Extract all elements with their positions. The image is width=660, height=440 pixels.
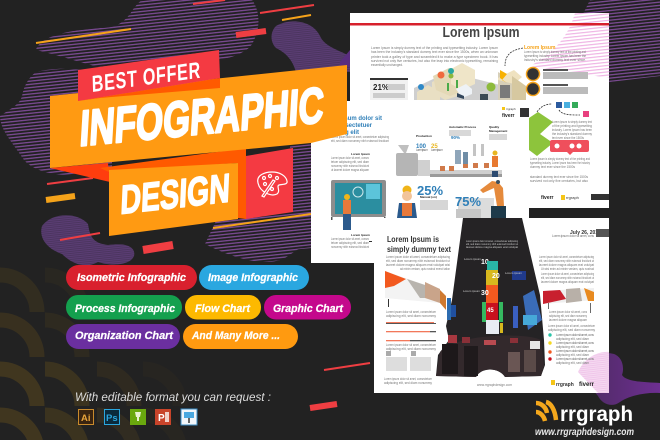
document 1 paragraph: has been the industry's standard dummy text ever since the 1500s, when an unknown — [371, 50, 498, 54]
tablet dashboard with worker — [331, 180, 386, 230]
left column text: elit, sed diam nonummy nibh euismod tincidunt ut — [386, 259, 450, 263]
document 1 paragraph: essentially unchanged. — [371, 63, 403, 67]
right lower list with bullets: adipiscing elit, sed diam nonummy — [549, 314, 587, 318]
stacked percentage tower: Lorem ipsum — [505, 271, 522, 275]
website: www.rrgraphdesign.com — [535, 427, 634, 438]
right lower list with bullets: adipiscing elit, sed diam — [556, 337, 589, 341]
social media icons and callout: text ever since the 1500s — [552, 136, 584, 140]
editable format text: With editable format you can request : — [75, 392, 271, 404]
document 2 text: Lorem ipsum dolor sit amet, consectetuer adipiscing — [331, 135, 389, 139]
right column text: elit, sed diam nonummy nibh euismod tincidunt ut — [539, 259, 594, 263]
lorem ipsum side heading and circles — [505, 45, 588, 96]
document 2 text: Management — [489, 129, 507, 133]
stacked percentage tower: 45 — [487, 308, 494, 314]
logo mark — [536, 402, 556, 421]
design text: DESIGN — [120, 165, 231, 223]
best offer shadow — [78, 78, 220, 101]
document 1 paragraph: printer took a galley of type and scrambled it to make a type specimen book. It has — [371, 55, 498, 59]
progress bars and lower left text: adipiscing elit, sed diam nonummy — [386, 347, 436, 351]
pill: graphic chart: Graphic Chart — [273, 303, 344, 315]
document 2 text: Lorem ipsum — [431, 148, 443, 152]
red icon square — [246, 148, 293, 219]
icon: illustrator: Ai — [81, 413, 90, 424]
document 2: process infographic — [311, 101, 529, 263]
document 3 footer logos: www.rrgraphdesign.com — [477, 383, 512, 387]
social media icons and callout: of the printing and typesetting — [552, 124, 592, 128]
pill: flow chart: Flow Chart — [195, 303, 251, 315]
document 2 heading: adipiscing elit — [319, 130, 359, 136]
right lower list with bullets: adipiscing elit, sed diam — [556, 361, 589, 365]
lorem ipsum side heading and circles: Lorem Ipsum is simply dummy text of the printing and — [524, 50, 586, 54]
progress bars and lower left text: adipiscing elit, sed diam nonummy — [386, 314, 436, 318]
software icons — [78, 409, 197, 425]
right lower list with bullets: Lorem ipsum dolor sit amet, cons — [549, 310, 587, 314]
pill: organization chart — [66, 324, 180, 349]
right lower list with bullets: adipiscing elit, sed diam — [556, 353, 589, 357]
document 2 heading — [319, 116, 382, 136]
main orange ribbon — [50, 65, 347, 168]
document 3: image infographic — [374, 218, 609, 393]
left brochure image — [385, 271, 446, 310]
logo wordmark: rrgraph — [560, 403, 633, 426]
trapezoid paragraph: Lorem ipsum dolor sit amet, consectetuer adipiscing — [466, 239, 518, 243]
stat 21% — [370, 78, 408, 100]
crowd — [436, 335, 544, 377]
right lower list with bullets: adipiscing elit, sed diam — [556, 345, 589, 349]
isometric city illustration — [414, 63, 526, 100]
pill: image infographic: Image Infographic — [208, 272, 298, 284]
document 2 logos: fiverr — [502, 113, 515, 119]
pill: isometric infographic: Isometric Infographic — [77, 272, 186, 284]
document 1 paragraph: survived not only five centuries, but also the leap into electronic typesetting, remaining — [371, 59, 498, 63]
date header — [552, 229, 609, 238]
pill: flow chart — [185, 295, 261, 320]
dark trapezoid with photo — [436, 218, 545, 377]
document 2 heading: Lorem ipsum dolor sit — [319, 116, 382, 122]
stacked percentage tower — [463, 257, 522, 320]
pill: process infographic: Process Infographic — [75, 303, 175, 315]
document 2 text: Automatic Process — [449, 125, 477, 129]
document 2 logos: rrgraph — [506, 107, 516, 111]
document 3 heading — [387, 234, 451, 254]
stat 21%: 21% — [373, 83, 389, 92]
rrgraph logo — [535, 402, 634, 438]
right lower list with bullets — [548, 303, 596, 365]
date header: Lorem ipsum dolor sit amet, cons — [552, 234, 594, 238]
best offer text: BEST OFFER — [91, 57, 201, 97]
document 2 text: Quality — [489, 125, 500, 129]
document 3 footer logos: rrgraph — [556, 382, 574, 388]
progress bars and lower left text: Lorem ipsum dolor sit amet, consectetuer — [384, 377, 433, 381]
right lower list with bullets: Lorem ipsum dolor sit amet, cons — [556, 333, 594, 337]
document 2 text: Lorem Ipsum — [351, 152, 370, 156]
right column text: laoreet dolore magna aliquam erat volutpat — [539, 263, 594, 267]
design panel — [109, 163, 238, 236]
document 2 text — [331, 125, 507, 249]
document 2 text: Lorem ipsum dolor sit amet, consec — [331, 156, 369, 160]
pill: image infographic — [199, 265, 309, 290]
right lower list with bullets: laoreet dolore magna aliquam — [549, 318, 587, 322]
right column text: elit, sed diam nonummy nibh euismod tincidunt ut — [541, 276, 594, 280]
icon: photoshop: Ps — [106, 413, 118, 424]
social media icons and callout: the industry's standard dummy — [552, 132, 592, 136]
document 1 paragraph: Lorem Ipsum is simply dummy text of the printing and typesetting industry. Lorem Ipsum — [371, 46, 498, 50]
right brochure image — [543, 288, 594, 304]
icon: keynote — [181, 409, 197, 425]
document 1: isometric infographic — [350, 13, 609, 208]
progress bars and lower left text: Lorem ipsum dolor sit amet, consectetuer — [386, 310, 437, 314]
social media icons and callout: fiverr — [541, 195, 554, 201]
right column text — [539, 255, 594, 284]
document 2 text: Lorem ipsum dolor sit amet, consec — [331, 237, 369, 241]
document 1 title: Lorem Ipsum — [442, 24, 520, 41]
social media icons and callout: typesetting industry. Lorem Ipsum has been the industry — [530, 161, 590, 165]
document 2 text: tetuer adipiscing elit, sed diam — [331, 160, 369, 164]
icon: powerpoint: P — [158, 413, 165, 424]
social media icons and callout: standard dummy text ever since the 1500s — [530, 175, 588, 179]
left column text: ad minim veniam, quis nostrud exerci tation — [400, 267, 450, 271]
right column text: laoreet dolore magna aliquam erat volutpat — [541, 280, 594, 284]
document 3 footer logos — [477, 380, 595, 388]
document 2 logos — [502, 107, 529, 119]
document 3 footer logos: fiverr — [579, 382, 595, 388]
document 3 heading: Lorem Ipsum is — [387, 234, 439, 244]
stacked percentage tower: Lorem ipsum — [464, 257, 482, 261]
stacked percentage tower: 10 — [481, 259, 489, 266]
date header: July 26, 2019 — [570, 230, 601, 236]
document 3 heading: simply dummy text — [387, 244, 451, 254]
document 2 text: nonummy nibh euismod tincidunt — [331, 245, 369, 249]
progress bars and lower left text — [384, 310, 437, 385]
icon: coreldraw — [130, 409, 146, 425]
pill: graphic chart — [264, 295, 351, 320]
document 2 heading: amet consectetuer — [319, 123, 373, 129]
right column text: Lorem ipsum dolor sit amet, consectetuer adipiscing — [539, 255, 594, 259]
worker with 25 percent stat: Manual (on) — [420, 195, 437, 199]
right lower list with bullets: Lorem ipsum dolor sit amet, cons — [556, 357, 594, 361]
pill: and many more — [183, 324, 298, 349]
document 2 text: elit, sed diam nonummy nibh euismod tincidunt — [331, 139, 389, 143]
progress bars and lower left text: Lorem ipsum dolor sit amet, consectetuer — [386, 343, 437, 347]
progress bars and lower left text: adipiscing elit, sed diam nonummy — [384, 381, 432, 385]
right lower list with bullets: Lorem ipsum dolor sit amet, cons — [556, 349, 594, 353]
icon: palette — [258, 172, 287, 197]
document 2 text: nonummy nibh euismod tincidunt — [331, 164, 369, 168]
worker with 25 percent stat — [397, 183, 448, 218]
stacked percentage tower: 30 — [481, 290, 489, 297]
lorem ipsum side heading and circles: typesetting industry. Lorem Ipsum has been the — [524, 54, 586, 58]
robot arm with 75 percent stat: 75% — [455, 194, 481, 209]
lorem ipsum side heading and circles: industry's standard dummy text ever since. — [524, 58, 586, 62]
right lower list with bullets: Lorem ipsum dolor sit amet, cons — [556, 341, 594, 345]
right column text: Ut wisi enim ad minim veniam, quis nostrud — [541, 267, 594, 271]
social media icons and callout — [529, 102, 609, 201]
document 2 text: 90% — [451, 135, 460, 140]
left column text: Lorem ipsum dolor sit amet, consectetuer adipiscing — [386, 255, 450, 259]
trapezoid paragraph — [466, 239, 518, 249]
pill: process infographic — [66, 295, 182, 320]
accent lines — [36, 0, 370, 408]
pink blob on document 3 — [578, 352, 609, 393]
lorem ipsum side heading and circles: Lorem Ipsum — [524, 45, 556, 51]
social media icons and callout: survived not only five centuries, but also — [530, 179, 588, 183]
decorative arcs bottom left — [0, 275, 180, 440]
pill: and many more: And Many More ... — [191, 330, 280, 342]
document 2 text: 25 — [431, 144, 438, 150]
social media icons and callout: Lorem Ipsum is simply dummy text — [552, 120, 592, 124]
pill: organization chart: Organization Chart — [75, 330, 174, 342]
category pills — [66, 265, 351, 349]
left column text — [386, 255, 450, 271]
worker with 25 percent stat: 25% — [417, 183, 443, 198]
ribbon shadow band — [100, 148, 246, 219]
left column text: laoreet dolore magna aliquam erat volutpat wisi — [386, 263, 450, 267]
ribbon fold — [50, 163, 110, 182]
document 2 text: ut laoreet dolore magna aliquam — [331, 168, 369, 172]
title ribbon group — [50, 50, 347, 236]
robot arm with 75 percent stat — [455, 180, 506, 218]
document 2 text: 100 — [416, 144, 427, 150]
factory machine illustration — [396, 144, 502, 177]
social media icons and callout: rrgraph — [566, 195, 579, 200]
document 2 text: Production — [416, 134, 432, 138]
social media icons and callout: industry. Lorem Ipsum has been — [552, 128, 592, 132]
social media icons and callout: Lorem Ipsum is simply dummy text of the printing and — [530, 157, 590, 161]
right column text: Lorem ipsum dolor sit amet, consectetuer adipiscing — [541, 272, 594, 276]
trapezoid paragraph: elit, sed diam nonummy nibh euismod tincidunt ut — [466, 242, 518, 246]
document 2 text: tetuer adipiscing elit, sed diam — [331, 241, 369, 245]
stacked percentage tower: 20 — [492, 273, 500, 280]
infographic text: INFOGRAPHIC — [78, 76, 326, 157]
pill: isometric infographic — [66, 265, 197, 290]
right lower list with bullets: adipiscing elit, sed diam nonummy — [548, 328, 595, 332]
document 1 paragraph — [371, 46, 498, 67]
trapezoid paragraph: laoreet dolore magna aliquam erat volutpat — [466, 245, 518, 249]
document 2 text: Lorem ipsum — [416, 148, 428, 152]
document 2 text: Lorem Ipsum — [351, 233, 370, 237]
social media icons and callout: dummy text ever since the 1500s — [530, 165, 575, 169]
right lower list with bullets: Lorem ipsum dolor sit amet, consectetuer — [548, 324, 596, 328]
stacked percentage tower: Lorem ipsum — [463, 289, 480, 293]
best offer banner — [78, 50, 220, 101]
